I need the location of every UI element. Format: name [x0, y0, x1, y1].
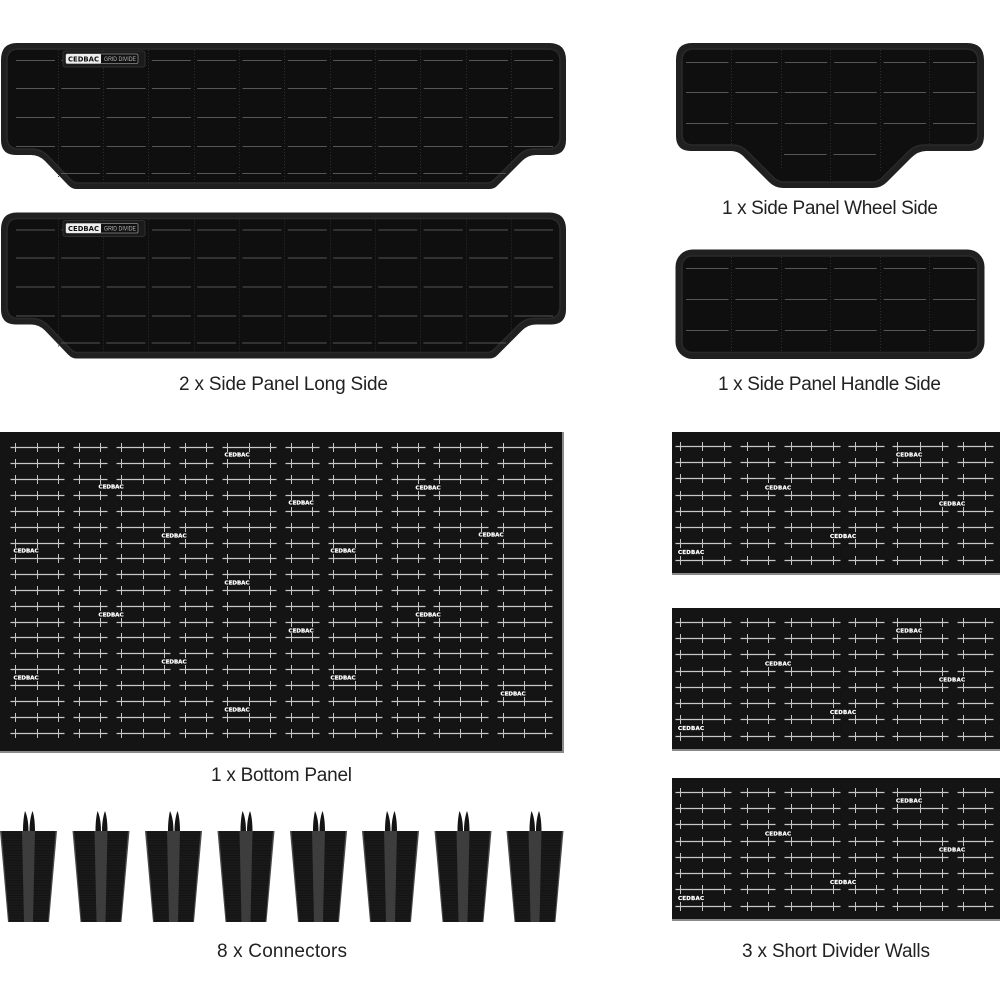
panel: short divider wall 3	[672, 778, 1000, 921]
connector 5	[290, 811, 347, 922]
panel: bottom panel: CEDBAC	[500, 692, 526, 698]
panel: short divider wall 1	[672, 432, 1000, 575]
panel: bottom panel: CEDBAC	[162, 534, 186, 540]
panel: side panel handle side	[676, 250, 984, 359]
connector 8	[506, 811, 564, 922]
caption: bottom panel: 1 x Bottom Panel	[211, 765, 352, 786]
logo badge upper	[63, 51, 145, 67]
panel: bottom panel: CEDBAC	[416, 486, 440, 492]
panel: side panel wheel side	[676, 43, 984, 188]
connector 7	[434, 811, 492, 922]
caption: short divider walls: 3 x Short Divider Walls	[742, 941, 930, 962]
caption: long side: 2 x Side Panel Long Side	[179, 374, 388, 395]
panel: bottom panel: CEDBAC	[330, 676, 356, 682]
logo badge lower: GRID DIVIDE	[104, 226, 137, 233]
panel: bottom panel: CEDBAC	[288, 500, 314, 506]
connector 3	[145, 811, 202, 922]
panel: bottom panel: CEDBAC	[330, 548, 356, 554]
panel: bottom panel: CEDBAC	[478, 532, 504, 538]
panel: bottom panel: CEDBAC	[224, 452, 250, 458]
panel: bottom panel: CEDBAC	[288, 628, 314, 634]
panel: bottom panel	[0, 432, 564, 753]
panel: bottom panel: CEDBAC	[224, 580, 250, 586]
connector 4	[218, 811, 274, 922]
caption: wheel side: 1 x Side Panel Wheel Side	[722, 198, 938, 219]
panel: bottom panel: CEDBAC	[14, 676, 38, 682]
connector 2	[72, 811, 130, 922]
logo badge lower	[63, 220, 145, 236]
logo badge upper: CEDBAC	[68, 55, 99, 63]
panel: bottom panel: CEDBAC	[98, 484, 124, 490]
panel: bottom panel: CEDBAC	[224, 708, 250, 714]
panel: bottom panel: CEDBAC	[98, 612, 124, 618]
caption: handle side: 1 x Side Panel Handle Side	[718, 374, 941, 395]
panel: side panel long side (lower)	[1, 212, 566, 358]
panel: side panel long side (upper)	[1, 43, 566, 189]
connector 6	[362, 811, 419, 922]
connector 1	[0, 811, 57, 922]
panel: bottom panel: CEDBAC	[162, 660, 186, 666]
panel: short divider wall 2	[672, 608, 1000, 751]
panel: bottom panel: CEDBAC	[14, 548, 38, 554]
logo badge upper: GRID DIVIDE	[104, 56, 137, 63]
panel: bottom panel: CEDBAC	[416, 612, 440, 618]
connectors group	[0, 811, 564, 922]
logo badge lower: CEDBAC	[68, 225, 99, 233]
caption: connectors: 8 x Connectors	[217, 941, 347, 962]
